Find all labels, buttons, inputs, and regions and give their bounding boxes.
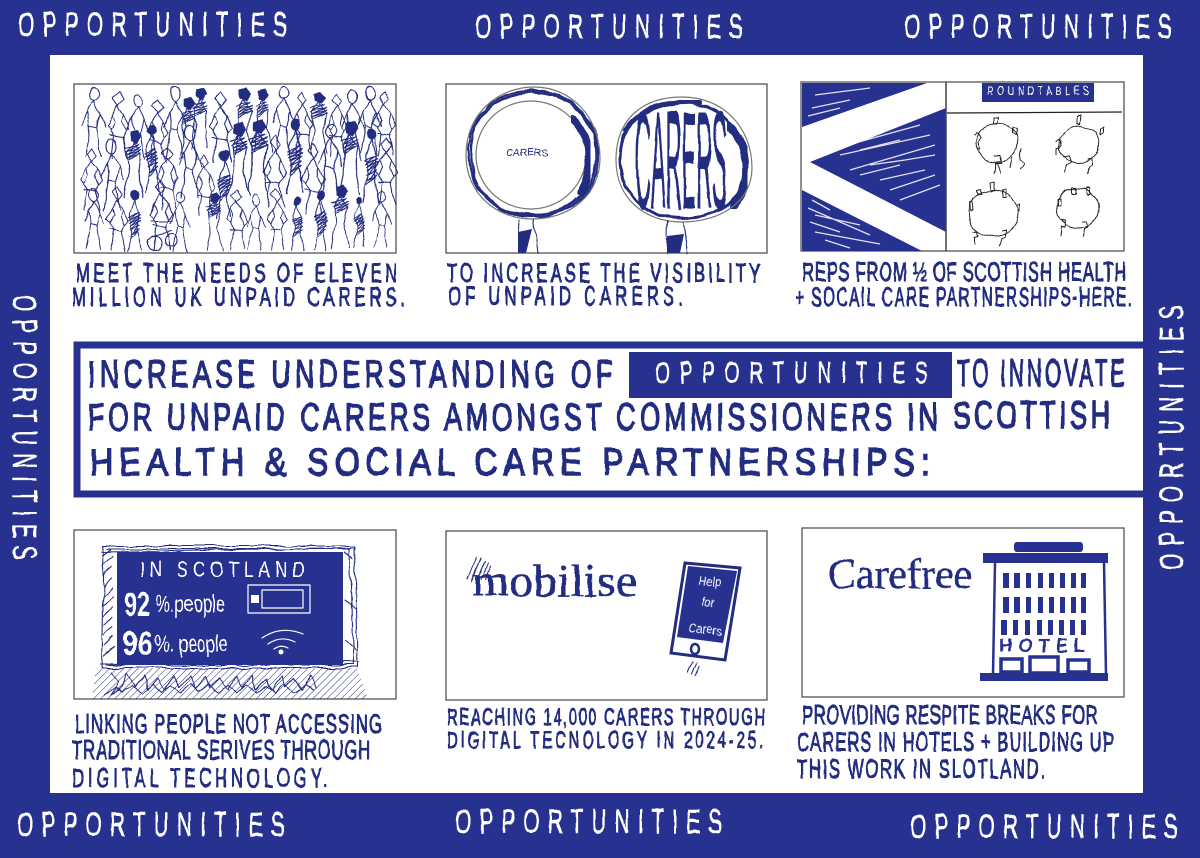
logo: Carefree: Carefree xyxy=(828,552,972,598)
border word: bottom centre: OPPORTUNITIES xyxy=(455,802,722,840)
caption: needs of eleven million: MEET THE NEEDS OF ELEVEN xyxy=(76,258,397,288)
caption: respite breaks xyxy=(797,700,1114,784)
caption: half of partnerships xyxy=(795,257,1132,312)
white main panel xyxy=(50,55,1143,793)
screen heading: IN SCOTLAND xyxy=(140,558,305,583)
icon: four roundtables xyxy=(968,116,1103,246)
panel: crowd of unpaid carers xyxy=(74,84,398,253)
caption: linking people: DIGITAL TECHNOLOGY. xyxy=(72,763,328,793)
icon: small text magnifier xyxy=(466,87,600,253)
heading line 1 end: TO INNOVATE xyxy=(957,353,1124,395)
panel: Carefree hotel xyxy=(802,528,1124,697)
heading line 2 end: SCOTTISH xyxy=(953,393,1110,436)
icon: small text magnifier: CARERS xyxy=(506,147,548,159)
caption: reaching 14,000 xyxy=(447,705,765,754)
icon: phone xyxy=(671,563,740,676)
heading line 2: FOR UNPAID CARERS AMONGST COMMISSIONERS IN xyxy=(88,395,938,438)
icon: hotel xyxy=(980,542,1108,681)
caption: reaching 14,000: DIGITAL TECNOLOGY IN 2024-25. xyxy=(447,728,763,754)
caption: half of partnerships: REPS FROM ½ OF SCOTTISH HEALTH xyxy=(802,257,1126,287)
caption: increase visibility: TO INCREASE THE VISIBILITY xyxy=(447,258,760,288)
caption: linking people: LINKING PEOPLE NOT ACCESSING xyxy=(75,709,382,739)
icon: phone: Carers xyxy=(688,620,723,639)
panel: flag and roundtables xyxy=(801,82,1124,251)
windows xyxy=(1001,573,1086,635)
caption: needs of eleven million xyxy=(72,258,405,312)
hotel sign: HOTEL xyxy=(999,636,1085,656)
icon: Scottish flag xyxy=(802,82,946,251)
icon: laptop sketch xyxy=(92,546,368,699)
caption: half of partnerships: + SOCAIL CARE PARTNERSHIPS-HERE. xyxy=(795,282,1132,312)
logo: mobilise: mobilise xyxy=(472,555,637,606)
border word: bottom right: OPPORTUNITIES xyxy=(910,807,1178,845)
border word: right side: OPPORTUNITIES xyxy=(1152,305,1190,570)
wheelchair xyxy=(148,222,177,250)
border word: left side: OPPORTUNITIES xyxy=(6,295,44,560)
statistic: 92% battery xyxy=(124,585,310,624)
caption: needs of eleven million: MILLION UK UNPAID CARERS. xyxy=(72,282,405,312)
panel: laptop Scotland statistics xyxy=(74,530,396,699)
caption: linking people xyxy=(72,709,382,793)
roundtables banner xyxy=(982,83,1094,102)
caption: respite breaks: CARERS IN HOTELS + BUILDING UP xyxy=(797,727,1114,757)
caption: respite breaks: THIS WORK IN SLOTLAND. xyxy=(797,754,1045,784)
statistic: 92% battery: %.people xyxy=(155,591,225,618)
crowd illustration xyxy=(81,86,398,252)
highlighted word xyxy=(629,352,952,398)
statistic: 96% wifi xyxy=(122,625,303,663)
caption: increase visibility xyxy=(447,258,760,311)
statistic: 92% battery: 92 xyxy=(124,586,150,624)
border word: top right: OPPORTUNITIES xyxy=(904,7,1172,45)
icon: phone: for xyxy=(701,594,715,611)
panel: mobilise app xyxy=(446,531,767,700)
caption: linking people: TRADITIONAL SERIVES THROUGH xyxy=(72,735,370,765)
roundtables banner: ROUNDTABLES xyxy=(987,85,1089,98)
heading line 1: INCREASE UNDERSTANDING OF xyxy=(88,352,612,395)
highlighted word: OPPORTUNITIES xyxy=(655,357,928,390)
statistic: 96% wifi: %. people xyxy=(155,631,228,658)
caption: respite breaks: PROVIDING RESPITE BREAKS FOR xyxy=(802,700,1098,730)
statistic: 96% wifi: 96 xyxy=(122,625,153,663)
caption: reaching 14,000: REACHING 14,000 CARERS THROUGH xyxy=(447,705,765,731)
border word: bottom left: OPPORTUNITIES xyxy=(17,805,285,843)
caption: increase visibility: OF UNPAID CARERS. xyxy=(448,281,683,311)
central statement box xyxy=(77,345,1143,494)
icon: phone: Help xyxy=(698,573,722,591)
border word: top centre: OPPORTUNITIES xyxy=(475,7,743,45)
panel: magnifying glasses xyxy=(446,84,767,253)
heading line 3: HEALTH & SOCIAL CARE PARTNERSHIPS: xyxy=(90,442,930,484)
border word: top left: OPPORTUNITIES xyxy=(18,5,287,43)
icon: large text magnifier xyxy=(616,84,752,253)
hotel doors xyxy=(1001,657,1089,673)
text: CARERS xyxy=(635,84,727,239)
